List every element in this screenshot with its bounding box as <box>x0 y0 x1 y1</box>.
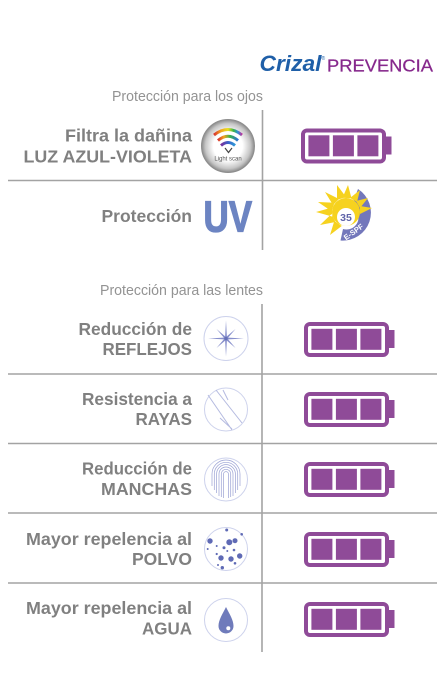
icon: Light scan <box>202 120 254 172</box>
label: Mayor repelencia al AGUA: AGUA <box>142 618 192 638</box>
icon: water drop <box>204 598 248 642</box>
logo: Crizal Prevencia: Crizal <box>260 51 322 76</box>
battery: luz azul <box>303 130 392 162</box>
label: Reducción de REFLEJOS: Reducción de <box>78 319 192 339</box>
icon: E-SPF 35 sun: E-SPF <box>342 222 366 242</box>
label: Reducción de MANCHAS: Reducción de <box>82 458 192 478</box>
icon: E-SPF 35 sun: 35 <box>340 212 352 224</box>
logo: Crizal Prevencia: PREVENCIA <box>327 56 433 76</box>
battery: rayas <box>306 394 394 425</box>
icon: scratches <box>204 388 248 431</box>
label: Protección: Protección <box>102 206 192 226</box>
label: Mayor repelencia al POLVO: POLVO <box>132 549 192 569</box>
label: Mayor repelencia al AGUA <box>26 598 192 638</box>
label: Reducción de REFLEJOS <box>78 319 192 359</box>
label: Mayor repelencia al POLVO <box>26 529 192 569</box>
label: Filtra la dañina LUZ AZUL-VIOLETA: LUZ AZUL-VIOLETA <box>24 146 192 166</box>
battery: manchas <box>306 464 394 495</box>
icon: reflections <box>204 316 248 360</box>
label: Reducción de REFLEJOS: REFLEJOS <box>102 339 192 359</box>
battery: polvo <box>306 534 394 565</box>
icon: E-SPF 35 sun <box>316 185 372 242</box>
label: Filtra la dañina LUZ AZUL-VIOLETA: Filtra la dañina <box>65 126 192 146</box>
label: Resistencia a RAYAS <box>82 389 192 429</box>
label: Filtra la dañina LUZ AZUL-VIOLETA <box>24 126 192 166</box>
table lines: eye protection <box>8 110 437 250</box>
icon: UV: UV <box>204 192 253 242</box>
icon: fingerprint <box>204 458 248 501</box>
table lines: lens protection <box>8 304 437 652</box>
battery: agua <box>306 604 394 635</box>
heading: eye protection: Protección para los ojos <box>112 89 263 105</box>
label: Mayor repelencia al AGUA: Mayor repelencia al <box>26 598 192 618</box>
logo: Crizal Prevencia <box>260 51 433 76</box>
icon: dust <box>204 528 248 570</box>
label: Resistencia a RAYAS: Resistencia a <box>82 389 192 409</box>
heading: lens protection: Protección para las lentes <box>100 283 263 299</box>
label: Mayor repelencia al POLVO: Mayor repelencia al <box>26 529 192 549</box>
label: Reducción de MANCHAS: MANCHAS <box>101 479 192 499</box>
icon: Light scan: Light scan <box>214 156 242 162</box>
battery: reflejos <box>306 324 394 355</box>
label: Reducción de MANCHAS <box>82 458 192 499</box>
logo: Crizal Prevencia: ® <box>322 55 326 62</box>
label: Resistencia a RAYAS: RAYAS <box>136 409 192 429</box>
